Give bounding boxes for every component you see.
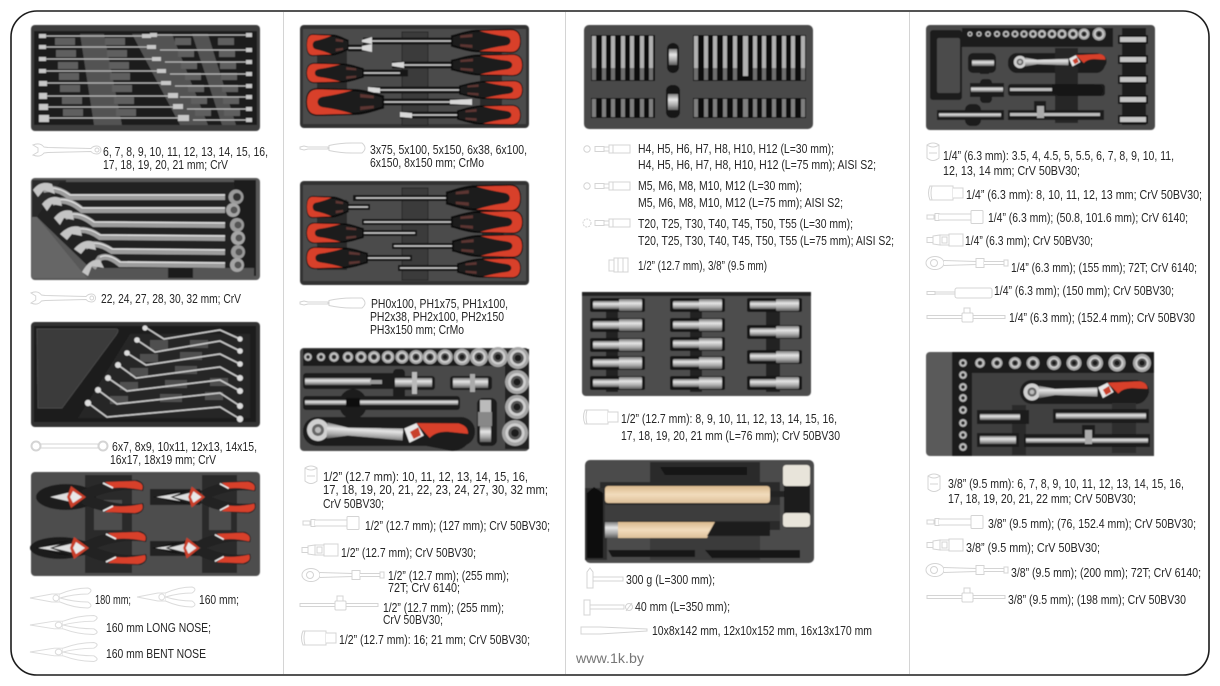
caption: T-bar: 3/8” (9.5 mm); (198 mm); CrV 50BV30	[1008, 593, 1186, 607]
caption: spline bits: M5, M6, M8, M10, M12 (L=75 mm); AISI S2;	[638, 196, 843, 210]
caption: 1/4 inch sockets: 12, 13, 14 mm; CrV 50BV30;	[943, 164, 1080, 178]
caption: 1/2 inch sockets: CrV 50BV30;	[323, 497, 384, 511]
caption: 1/2 inch deep sockets	[621, 412, 840, 443]
caption: slotted sizes: 6x150, 8x150 mm; CrMo	[370, 156, 484, 170]
icon: extension bar	[927, 516, 983, 528]
icon: large combination spanner	[31, 292, 96, 304]
panel: column 1 spanners and pliers	[30, 25, 268, 662]
icon: ring spanner	[32, 442, 108, 450]
caption: chisels: 10x8x142 mm, 12x10x152 mm, 16x13x170 mm	[652, 624, 872, 638]
tray: hammers and chisels	[585, 460, 814, 563]
icon: bent nose pliers	[30, 642, 97, 662]
tray: ring spanners	[31, 322, 260, 427]
icon: deep socket	[302, 631, 336, 645]
icon: long nose pliers	[30, 616, 97, 634]
caption: 1/4 inch sockets	[943, 149, 1174, 178]
icon: torx bit	[583, 219, 630, 227]
caption: universal joint: 3/8” (9.5 mm); CrV 50BV30;	[966, 541, 1100, 555]
icon: cutting pliers	[137, 587, 195, 607]
caption: 1/2 inch deep sockets: 17, 18, 19, 20, 21 mm (L=76 mm); CrV 50BV30	[621, 429, 840, 443]
caption: 3/8 inch sockets: 17, 18, 19, 20, 21, 22 mm; CrV 50BV30;	[948, 492, 1136, 506]
panel: column 4 1/4 and 3/8 inch sets	[926, 25, 1202, 607]
caption: adapters: 1/2” (12.7 mm), 3/8” (9.5 mm)	[638, 259, 767, 273]
caption: 3/8 inch sockets	[948, 477, 1184, 506]
caption: mallet: 40 mm (L=350 mm);	[635, 600, 730, 614]
tray: bit sockets	[584, 25, 813, 129]
caption: 1/2 inch sockets	[323, 470, 548, 511]
icon: spinner handle	[927, 288, 992, 298]
caption: 1/2 inch sockets: 1/2” (12.7 mm): 10, 11, 12, 13, 14, 15, 16,	[323, 470, 528, 484]
caption: spline bits: M5, M6, M8, M10, M12 (L=30 mm);	[638, 179, 802, 193]
caption: ratchet: 1/2” (12.7 mm); (255 mm);	[388, 569, 509, 583]
caption: ring spanner sizes	[110, 440, 257, 467]
icon: universal joint	[927, 539, 963, 551]
caption: spanner sizes 6-21: 6, 7, 8, 9, 10, 11, 12, 13, 14, 15, 16,	[103, 145, 268, 159]
caption: extension bar: 1/2” (12.7 mm); (127 mm); CrV 50BV30;	[365, 519, 550, 533]
caption: slotted sizes: 3x75, 5x100, 5x150, 6x38, 6x100,	[370, 143, 527, 157]
caption: torx bits	[638, 217, 894, 248]
caption: torx bits: T20, T25, T30, T40, T45, T50, T55 (L=30 mm);	[638, 217, 853, 231]
icon: spline bit	[584, 182, 630, 190]
tray: deep sockets	[582, 292, 811, 396]
caption: Phillips sizes: PH2x38, PH2x100, PH2x150	[370, 310, 504, 324]
tray: combination spanners 6-21 mm	[31, 25, 260, 131]
icon: extension bar	[927, 210, 983, 224]
caption: T-bar: CrV 50BV30;	[383, 613, 443, 627]
caption: spanner sizes 6-21: 17, 18, 19, 20, 21 mm; CrV	[103, 158, 228, 172]
caption: hex bits: H4, H5, H6, H7, H8, H10, H12 (L=75 mm); AISI S2;	[638, 158, 876, 172]
caption: hex bits: H4, H5, H6, H7, H8, H10, H12 (L=30 mm);	[638, 142, 834, 156]
caption: Phillips sizes	[370, 297, 508, 337]
icon: deep socket	[584, 410, 618, 424]
icon: T-bar	[300, 596, 378, 610]
icon: engineer hammer	[587, 568, 623, 588]
caption: hammer: 300 g (L=300 mm);	[626, 573, 715, 587]
caption: T-bar: 1/2” (12.7 mm); (255 mm);	[383, 601, 504, 615]
icon: slotted screwdriver	[300, 143, 365, 153]
icon: T-bar	[927, 588, 1005, 602]
icon: soft mallet	[584, 600, 632, 615]
tray: 3/8 inch socket set	[926, 352, 1154, 456]
caption: T-bar	[383, 601, 504, 627]
caption: spanner sizes 6-21	[103, 145, 268, 172]
caption: spinner handle: 1/4” (6.3 mm); (150 mm); CrV 50BV30;	[994, 284, 1174, 298]
caption: Phillips sizes: PH0x100, PH1x75, PH1x100,	[371, 297, 508, 311]
label: long nose: 160 mm LONG NOSE;	[106, 621, 211, 635]
caption: ratchet: 72T; CrV 6140;	[388, 581, 460, 595]
tray: 1/4 inch socket set	[926, 25, 1155, 130]
icon: socket	[305, 466, 317, 484]
label: 180 mm: 180 mm;	[95, 593, 131, 607]
caption: spline bits	[638, 179, 843, 210]
icon: deep socket	[928, 186, 963, 200]
caption: universal joint: 1/4” (6.3 mm); CrV 50BV30;	[965, 234, 1093, 248]
caption: torx bits: T20, T25, T30, T40, T45, T50, T55 (L=75 mm); AISI S2;	[638, 234, 894, 248]
icon: universal joint	[927, 234, 963, 246]
label: 160 mm: 160 mm;	[199, 593, 239, 607]
caption: 1/2 inch deep sockets: 1/2” (12.7 mm): 8, 9, 10, 11, 12, 13, 14, 15, 16,	[621, 412, 837, 426]
icon: combination spanner	[33, 144, 101, 156]
panel: column 2 screwdrivers and 1/2 inch set	[300, 25, 550, 647]
icon: combination pliers	[30, 588, 91, 608]
tray: pliers	[30, 472, 260, 576]
icon: chisel	[581, 627, 647, 634]
watermark: website: www.1k.by	[575, 650, 644, 666]
icon: universal joint	[302, 544, 338, 556]
caption: slotted sizes	[370, 143, 527, 170]
tray: Phillips screwdrivers	[300, 181, 529, 285]
caption: Phillips sizes: PH3x150 mm; CrMo	[370, 323, 464, 337]
caption: deep sockets: 1/2” (12.7 mm): 16; 21 mm; CrV 50BV30;	[339, 633, 530, 647]
icon: adapter	[609, 258, 628, 272]
panel: column 3 bits, deep sockets, hammers	[575, 25, 894, 666]
icon: socket	[928, 474, 940, 492]
tray: combination spanners 22-32 mm	[31, 178, 260, 280]
caption: 1/4 inch sockets: 1/4” (6.3 mm): 3.5, 4, 4.5, 5, 5.5, 6, 7, 8, 9, 10, 11,	[943, 149, 1174, 163]
icon: T-bar	[927, 308, 1005, 322]
icon: ratchet	[926, 256, 1008, 270]
caption: hex bits	[638, 142, 876, 172]
icon: socket	[927, 143, 939, 160]
caption: ring spanner sizes: 16x17, 18x19 mm; CrV	[110, 453, 216, 467]
label: bent nose: 160 mm BENT NOSE	[106, 647, 206, 661]
caption: ring spanner sizes: 6x7, 8x9, 10x11, 12x13, 14x15,	[112, 440, 257, 454]
icon: ratchet	[926, 564, 1008, 576]
caption: ratchet	[388, 569, 509, 595]
tray: 1/2 inch socket set	[300, 347, 529, 452]
icon: ratchet	[302, 568, 384, 582]
tray: slotted screwdrivers	[300, 25, 529, 128]
icon: extension bar	[303, 516, 359, 530]
icon: hex bit	[584, 145, 630, 153]
caption: spanner sizes 22-32: 22, 24, 27, 28, 30, 32 mm; CrV	[101, 292, 241, 306]
icon: Phillips screwdriver	[300, 298, 365, 308]
caption: 1/2 inch sockets: 17, 18, 19, 20, 21, 22, 23, 24, 27, 30, 32 mm;	[323, 483, 548, 497]
caption: universal joint: 1/2” (12.7 mm); CrV 50BV30;	[341, 546, 476, 560]
